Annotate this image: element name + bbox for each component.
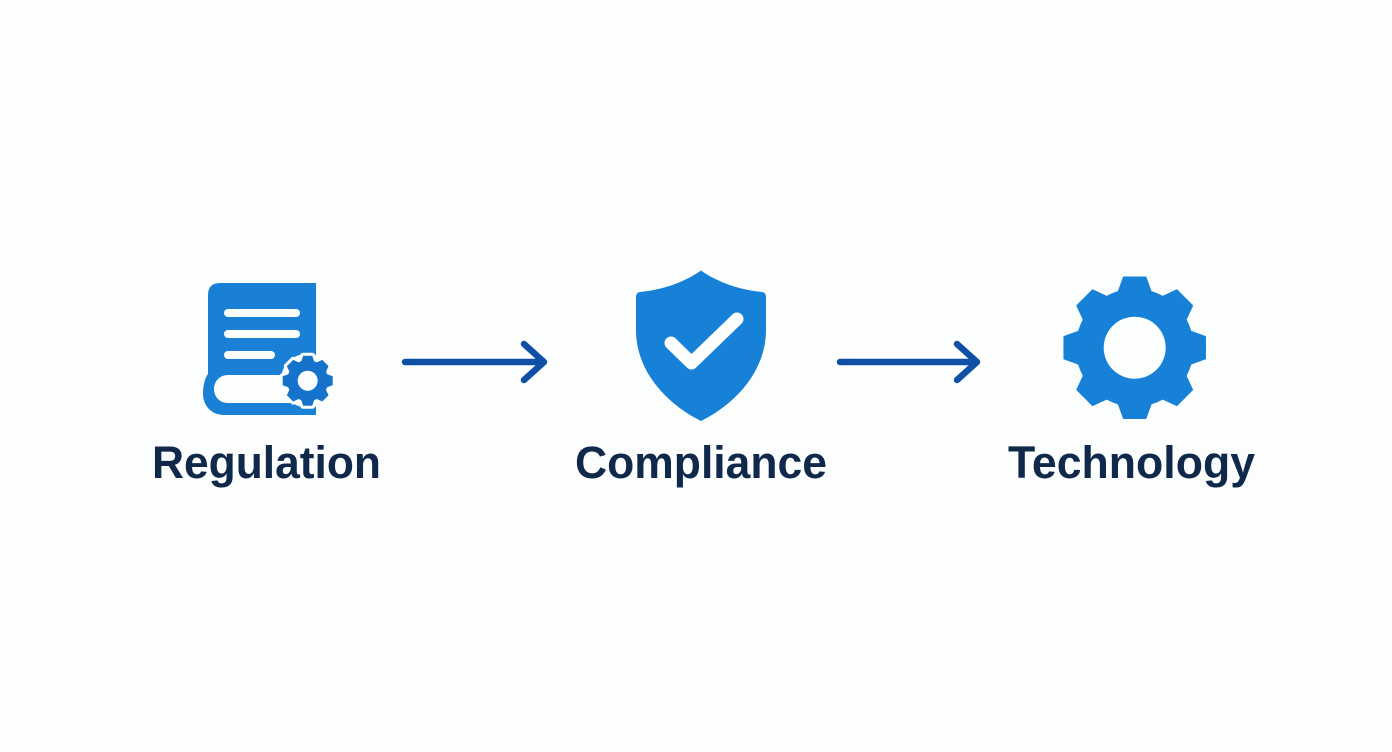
icon: large gear bbox=[1064, 277, 1205, 418]
label: Regulation: Regulation bbox=[152, 437, 381, 488]
check mark bbox=[671, 319, 737, 363]
book pages bbox=[214, 375, 320, 403]
panel: technology bbox=[1008, 277, 1255, 488]
small gear bbox=[281, 354, 335, 408]
icon: rulebook with gear bbox=[203, 283, 335, 415]
shield bbox=[636, 270, 766, 421]
label: Compliance: Compliance bbox=[575, 437, 827, 488]
arrow: regulation to compliance bbox=[405, 344, 544, 380]
panel: compliance bbox=[575, 270, 827, 488]
icon: shield with check mark bbox=[636, 270, 766, 421]
book cover bbox=[203, 283, 316, 415]
arrow: compliance to technology bbox=[840, 344, 977, 380]
panel: regulation bbox=[152, 283, 381, 488]
text lines bbox=[224, 309, 300, 359]
label: Technology: Technology bbox=[1008, 437, 1255, 488]
